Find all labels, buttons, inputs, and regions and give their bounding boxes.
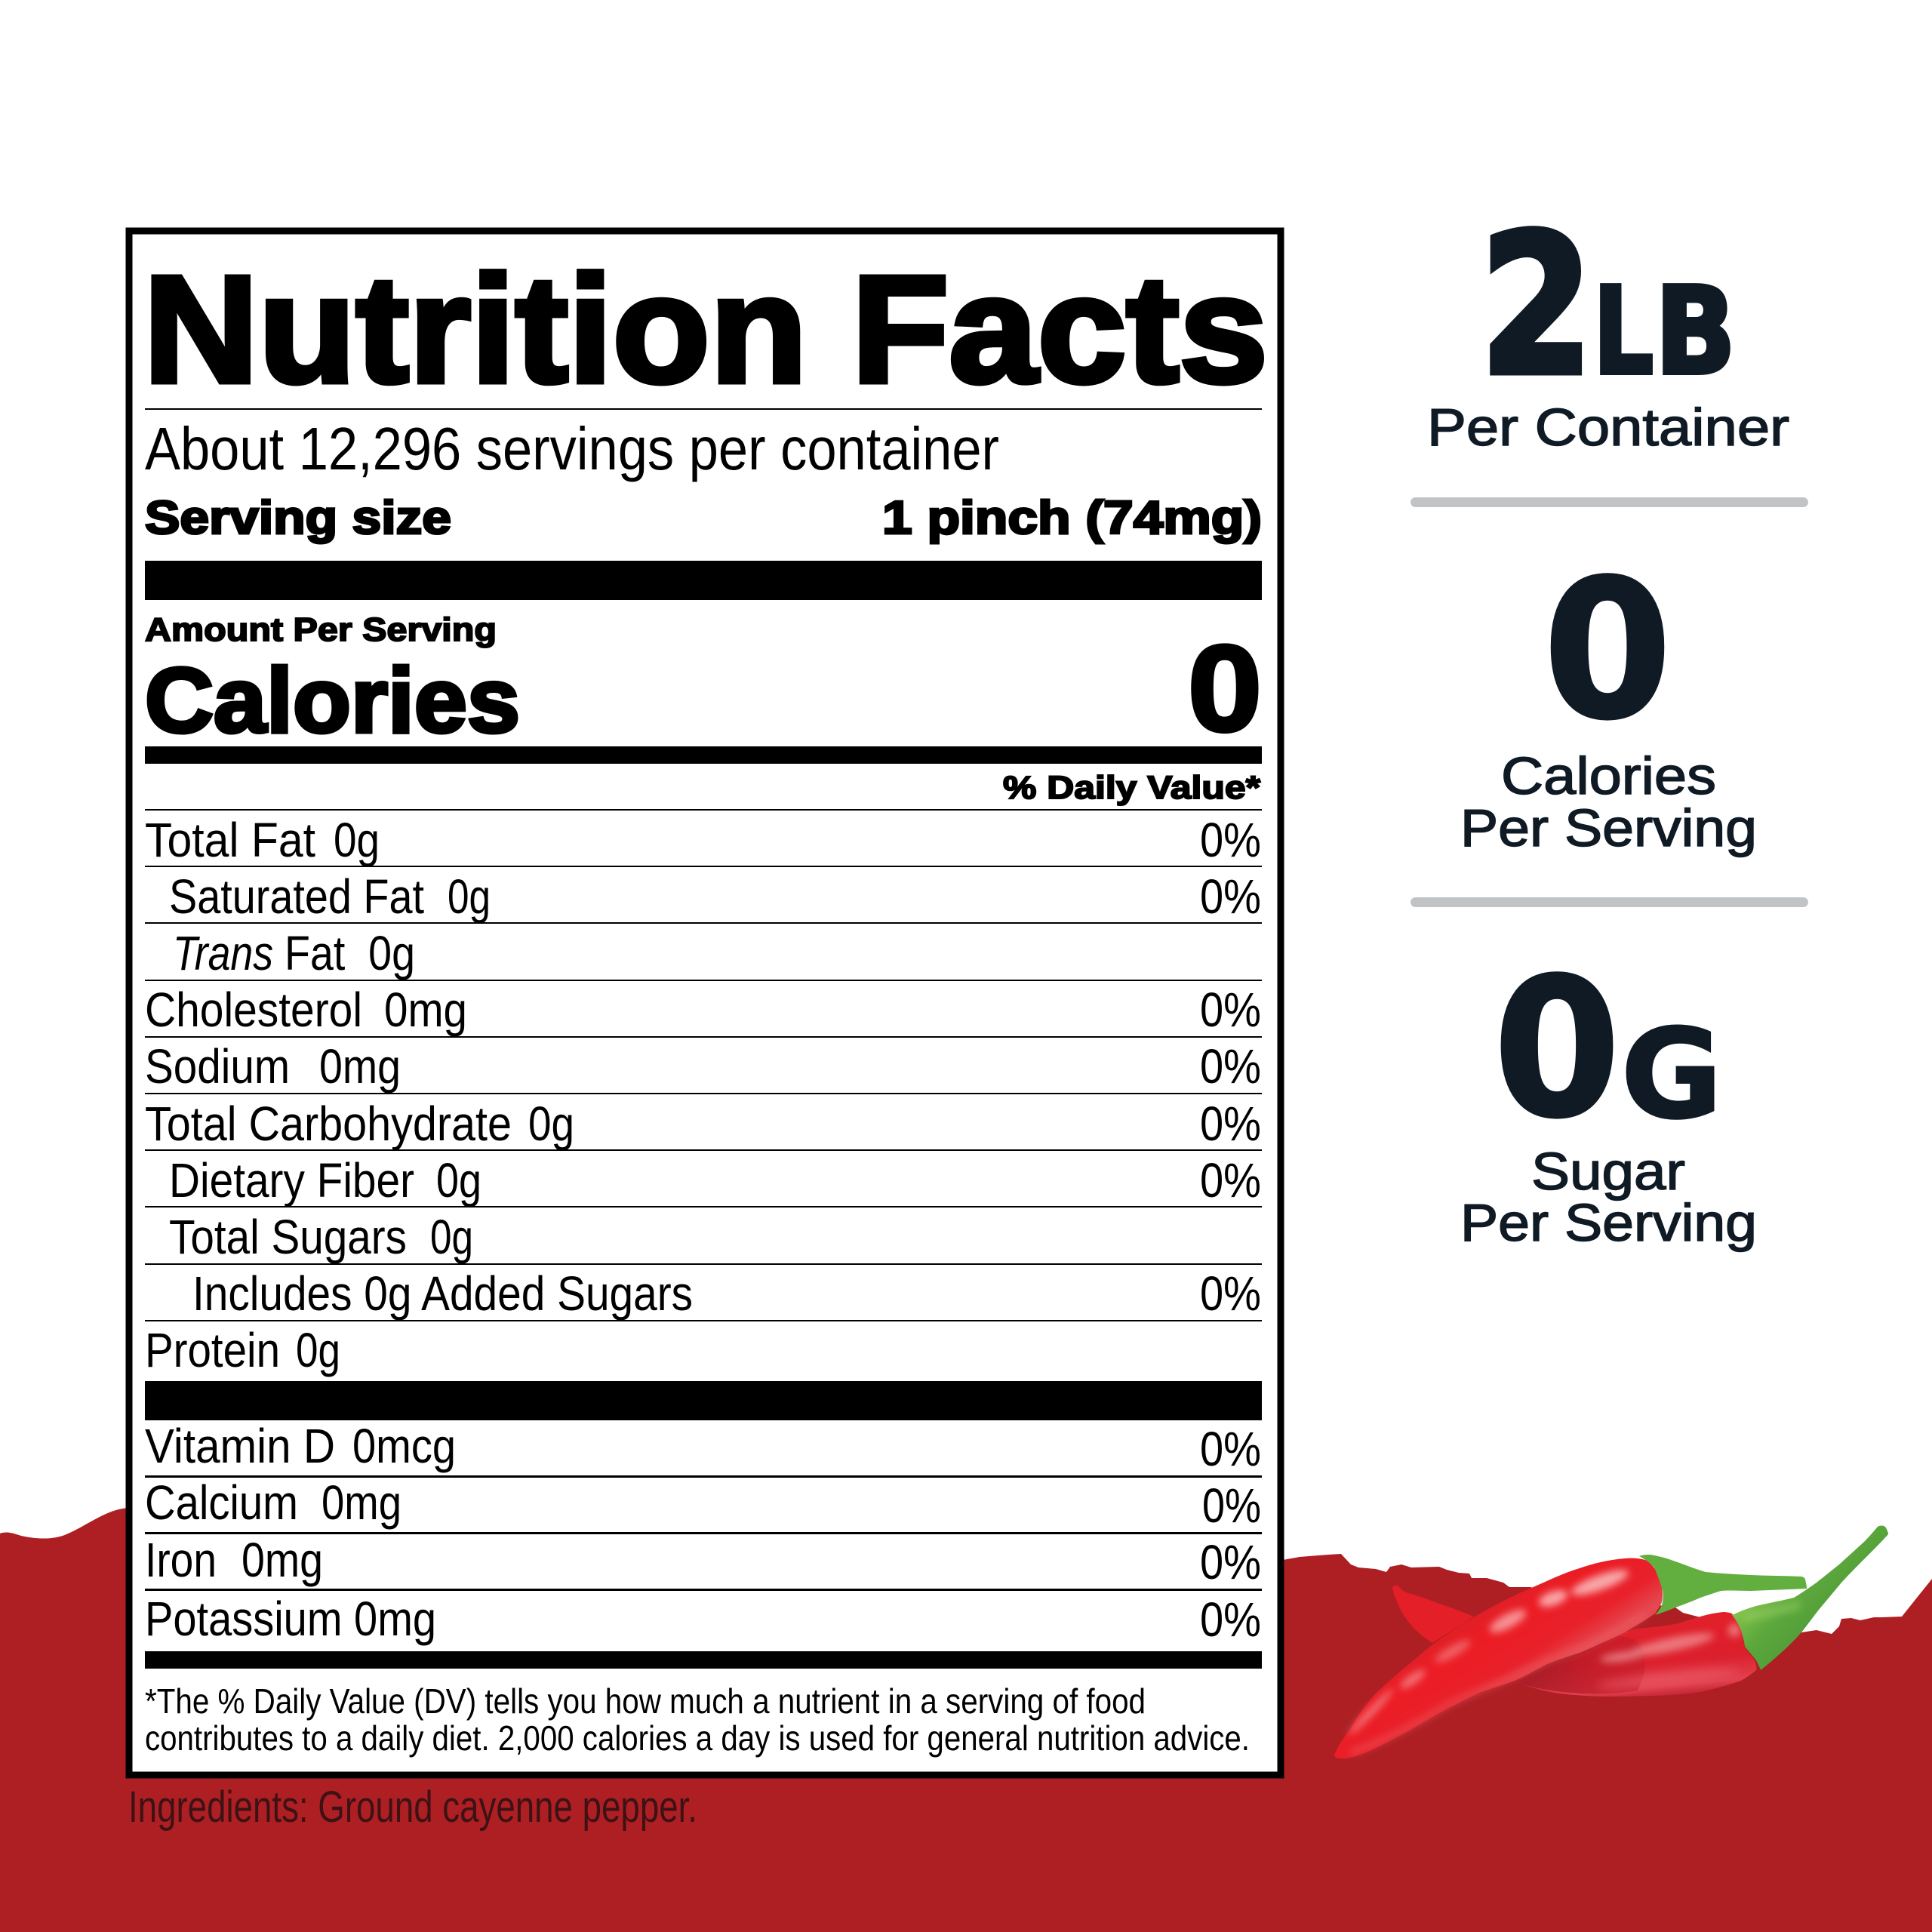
upper pepper stem: [1639, 1555, 1807, 1615]
row: saturated fat: 0%: [1200, 869, 1261, 924]
row: calcium: 0mg: [321, 1475, 401, 1530]
front pepper lower sheen: [1351, 1615, 1645, 1752]
row: sodium: Sodium: [145, 1039, 290, 1094]
divider 1: [1411, 497, 1808, 507]
row: protein: Protein: [145, 1323, 280, 1377]
row: added sugars: 0%: [1200, 1266, 1261, 1321]
stat: 2 lb per container: B: [1655, 262, 1736, 401]
stat: 2 lb per container: [1427, 194, 1789, 457]
daily value heading: % Daily Value*: [1003, 770, 1260, 806]
back pepper shadow under front pepper: [1517, 1636, 1645, 1694]
row: dietary fiber: Dietary Fiber: [169, 1153, 414, 1208]
amount per serving: Amount Per Serving: [145, 611, 497, 648]
row: iron: Iron: [145, 1533, 217, 1587]
row: saturated fat: [145, 869, 1262, 924]
rule under title: [145, 408, 1262, 410]
row: trans fat: Fat 0g: [285, 926, 415, 980]
back pepper body: [1517, 1612, 1756, 1697]
serving size label: Serving size: [145, 492, 451, 544]
row: added sugars: Includes 0g Added Sugars: [192, 1266, 693, 1321]
row: total fat: 0g: [334, 813, 380, 867]
row: dietary fiber: 0g: [436, 1153, 481, 1208]
row: total fat: Total Fat: [145, 813, 315, 867]
thick bar 1: [145, 561, 1262, 600]
calories value: 0: [1188, 620, 1262, 757]
row: added sugars: [145, 1266, 1262, 1321]
divider 2: [1411, 897, 1808, 907]
row: sodium: 0mg: [319, 1039, 401, 1094]
row: saturated fat: 0g: [448, 869, 491, 924]
medium bar 4: [145, 1651, 1262, 1669]
thick bar 3: [145, 1381, 1262, 1420]
row: trans fat: [145, 926, 1262, 981]
row: calcium: Calcium: [145, 1475, 298, 1530]
stat: 2 lb per container: 2: [1480, 194, 1593, 418]
row: vitamin d: 0%: [1200, 1422, 1261, 1476]
panel: nutrition facts label: [129, 231, 1281, 1775]
stat: 0 g sugar per serving: Sugar: [1531, 1142, 1685, 1201]
row: vitamin d: [145, 1419, 1262, 1478]
row: total fat: 0%: [1200, 813, 1261, 867]
footnote: *The % Daily Value (DV) tells you how much a nutrient in a serving of food: [145, 1681, 1146, 1721]
medium bar 2: [145, 746, 1262, 764]
row: total carbohydrate: [145, 1097, 1262, 1151]
stat: 0 g sugar per serving: Per Serving: [1460, 1193, 1757, 1252]
row: vitamin d: 0mcg: [352, 1419, 456, 1473]
row: potassium: [145, 1592, 1261, 1647]
back pepper lower sheen: [1596, 1665, 1740, 1692]
row: sodium: 0%: [1200, 1039, 1261, 1094]
row: total sugars: Total Sugars: [169, 1210, 407, 1264]
row: total carbohydrate: 0g: [528, 1097, 574, 1151]
row: total sugars: 0g: [430, 1210, 473, 1264]
stat: 0 calories per serving: [1460, 539, 1757, 857]
back pepper tail: [1392, 1586, 1474, 1643]
row: potassium: 0%: [1200, 1592, 1261, 1647]
row: trans fat: Trans: [173, 926, 273, 980]
row: cholesterol: Cholesterol: [145, 983, 362, 1037]
stat: 0 calories per serving: Calories: [1501, 746, 1716, 805]
row: vitamin d: Vitamin D: [145, 1419, 335, 1473]
row: potassium: Potassium 0mg: [145, 1592, 436, 1646]
row: saturated fat: Saturated Fat: [169, 869, 424, 924]
back pepper highlights: [1599, 1623, 1740, 1664]
calories label: Calories: [145, 649, 520, 752]
row: iron: [145, 1533, 1262, 1591]
stat: 2 lb per container: L: [1593, 262, 1654, 401]
row: sodium: [145, 1039, 1262, 1094]
footnote: contributes to a daily diet. 2,000 calories a day is used for general nutrition advice.: [145, 1718, 1250, 1758]
row: iron: 0%: [1200, 1535, 1261, 1589]
serving size value: 1 pinch (74mg): [882, 492, 1262, 544]
red torn-edge background: [0, 1508, 1932, 1932]
row: calcium: [145, 1475, 1262, 1534]
title: Nutrition Facts: Nutrition Facts: [143, 244, 1268, 414]
stat: 0 g sugar per serving: 0: [1494, 937, 1620, 1160]
stem light streak: [1743, 1604, 1800, 1619]
row: total sugars: [145, 1210, 1262, 1265]
stat: 0 calories per serving: Per Serving: [1460, 798, 1757, 857]
lower pepper stem: [1732, 1526, 1888, 1670]
footnote: [145, 1681, 1250, 1758]
servings per container: About 12,296 servings per container: [145, 415, 999, 482]
row: cholesterol: 0mg: [384, 983, 467, 1037]
row: cholesterol: [145, 983, 1262, 1038]
row: protein: 0g: [296, 1323, 340, 1377]
front pepper highlights: [1347, 1565, 1631, 1737]
row: iron: 0mg: [242, 1533, 323, 1587]
row: dietary fiber: [145, 1153, 1262, 1208]
row: total carbohydrate: 0%: [1200, 1097, 1261, 1151]
rule under daily value: [145, 809, 1262, 811]
row: total carbohydrate: Total Carbohydrate: [145, 1097, 512, 1151]
stat: 0 g sugar per serving: G: [1621, 1004, 1722, 1146]
stat: 2 lb per container: Per Container: [1427, 398, 1789, 457]
stat: 0 g sugar per serving: [1460, 937, 1757, 1252]
front pepper body: [1334, 1558, 1663, 1758]
stat: 0 calories per serving: 0: [1543, 539, 1672, 761]
icon: red chili peppers: [1334, 1526, 1888, 1758]
row: calcium: 0%: [1202, 1478, 1261, 1533]
row: cholesterol: 0%: [1200, 983, 1261, 1037]
ingredients: Ingredients: Ground cayenne pepper.: [128, 1783, 697, 1832]
row: total fat: [145, 813, 1262, 867]
row: dietary fiber: 0%: [1200, 1153, 1261, 1208]
